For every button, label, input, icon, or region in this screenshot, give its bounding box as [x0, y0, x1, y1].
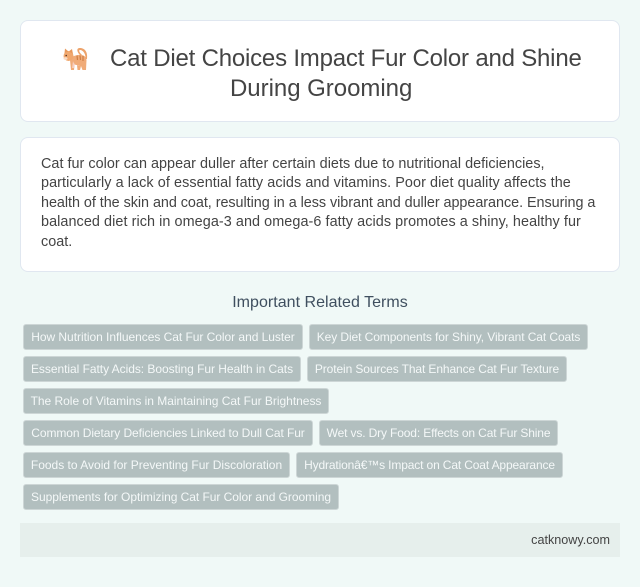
description text: health of the skin and coat, resulting in a less vibrant and duller appearance. Ensuring a: [41, 195, 595, 211]
tag: Hydrationâ€™s Impact on Cat Coat Appearance: [304, 458, 555, 472]
tag: [23, 324, 303, 350]
footer source: catknowy.com: [531, 533, 610, 547]
tags: related terms: [23, 324, 588, 510]
tag: [307, 356, 567, 382]
tag: Protein Sources That Enhance Cat Fur Texture: [315, 362, 559, 376]
title: [110, 45, 582, 102]
tag: Wet vs. Dry Food: Effects on Cat Fur Shine: [327, 426, 550, 440]
tag: The Role of Vitamins in Maintaining Cat Fur Brightness: [31, 394, 321, 408]
footer bar: [20, 523, 620, 557]
description text: [41, 156, 596, 250]
description text: Cat fur color can appear duller after certain diets due to nutritional deficiencies,: [41, 156, 545, 172]
tag: [296, 452, 563, 478]
tag: Essential Fatty Acids: Boosting Fur Health in Cats: [31, 362, 293, 376]
tag: Key Diet Components for Shiny, Vibrant Cat Coats: [317, 330, 580, 344]
tag: [23, 388, 329, 414]
tag: Supplements for Optimizing Cat Fur Color and Grooming: [31, 490, 331, 504]
tag: How Nutrition Influences Cat Fur Color and Luster: [31, 330, 295, 344]
tag: [23, 420, 313, 446]
tag: Foods to Avoid for Preventing Fur Discoloration: [31, 458, 282, 472]
heading: related terms: Important Related Terms: [232, 294, 408, 311]
tag: [309, 324, 588, 350]
title: Cat Diet Choices Impact Fur Color and Shine: [110, 45, 582, 72]
tag: [319, 420, 558, 446]
tag: [23, 484, 339, 510]
description text: particularly a lack of essential fatty acids and vitamins. Poor diet quality affects the: [41, 175, 571, 191]
tag: [23, 452, 290, 478]
tag: Common Dietary Deficiencies Linked to Dull Cat Fur: [31, 426, 305, 440]
icon: cat: [64, 48, 88, 70]
panel: description card: [20, 137, 620, 272]
panel: title card: [20, 20, 620, 122]
description text: coat.: [41, 234, 72, 250]
tag: [23, 356, 301, 382]
description text: balanced diet rich in omega-3 and omega-6 fatty acids promotes a shiny, healthy fur: [41, 214, 581, 230]
title: During Grooming: [230, 74, 412, 102]
